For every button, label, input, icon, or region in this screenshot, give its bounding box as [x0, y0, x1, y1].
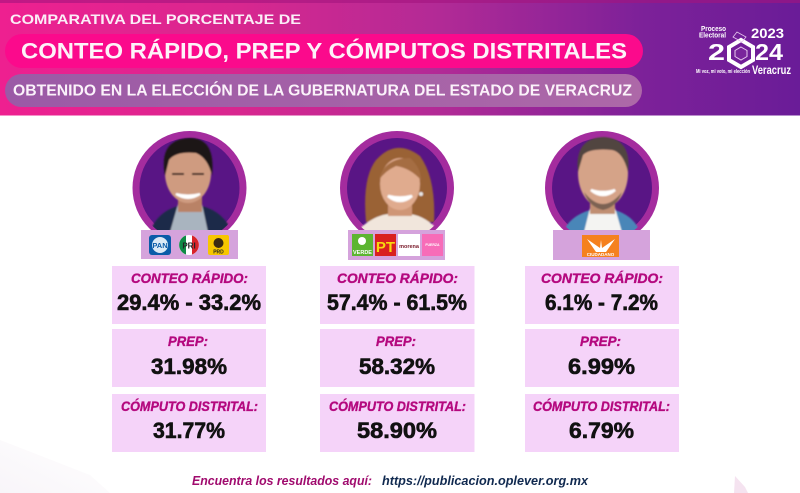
header line: comparativa: COMPARATIVA DEL PORCENTAJE DE [10, 11, 301, 27]
stat: conteo rápido 1: 29.4% - 33.2% [117, 290, 261, 315]
logo PRD: PRD [213, 250, 224, 256]
candidate 2 party logos [348, 230, 445, 260]
stat: PREP 2: 58.32% [359, 354, 435, 379]
stat: conteo rápido 2: CONTEO RÁPIDO: [337, 271, 458, 286]
logo: Proceso Electoral 2023-2024 Veracruz: Electoral [699, 30, 726, 40]
logo Movimiento Ciudadano: CIUDADANO [587, 252, 615, 257]
stat: cómputo distrital 2: CÓMPUTO DISTRITAL: [329, 399, 466, 414]
logo Fuerza por México: FUERZA [425, 243, 440, 247]
stat: PREP 2: PREP: [376, 334, 416, 349]
pink title pill: CONTEO RÁPIDO, PREP Y CÓMPUTOS DISTRITALES [21, 38, 627, 64]
stat: conteo rápido 3 [525, 266, 679, 324]
logo: Proceso Electoral 2023-2024 Veracruz: 2 [708, 39, 725, 65]
stat: cómputo distrital 2 [320, 394, 474, 452]
stat: PREP 1 [112, 329, 266, 387]
candidate 3 portrait [545, 131, 659, 230]
footer link line: Encuentra los resultados aquí: [192, 474, 372, 488]
stat: conteo rápido 3: CONTEO RÁPIDO: [541, 271, 663, 286]
logo PAN: PAN [152, 241, 168, 250]
candidate 1 party logos [141, 230, 238, 259]
logo: Proceso Electoral 2023-2024 Veracruz: Proceso [701, 24, 726, 33]
stat: cómputo distrital 1: CÓMPUTO DISTRITAL: [121, 399, 258, 414]
footer link line: https://publicacion.oplever.org.mx [382, 474, 589, 488]
logo: Proceso Electoral 2023-2024 Veracruz [696, 24, 791, 77]
stat: cómputo distrital 3 [525, 394, 679, 452]
stat: cómputo distrital 2: 58.90% [357, 418, 437, 443]
stat: PREP 3: 6.99% [568, 354, 635, 379]
logo PRI: PRI [182, 242, 196, 250]
stat: conteo rápido 2 [320, 266, 474, 324]
stat: PREP 1: 31.98% [151, 354, 227, 379]
stat: PREP 3: PREP: [580, 334, 621, 349]
candidate 1 portrait [132, 131, 246, 230]
stat: conteo rápido 1 [112, 266, 266, 324]
logo: Proceso Electoral 2023-2024 Veracruz: Mi voz, mi voto, mi elección [696, 69, 750, 75]
footer link line [192, 474, 589, 488]
logo: Proceso Electoral 2023-2024 Veracruz: Veracruz [752, 65, 791, 77]
purple subtitle pill [5, 74, 642, 107]
header banner [0, 0, 800, 116]
logo Verde: VERDE [353, 250, 372, 256]
stat: cómputo distrital 3: CÓMPUTO DISTRITAL: [533, 399, 670, 414]
column 2 results [320, 266, 474, 452]
logo: Proceso Electoral 2023-2024 Veracruz: 24 [755, 39, 783, 65]
stat: cómputo distrital 3: 6.79% [569, 418, 634, 443]
candidate 2 portrait [340, 131, 454, 230]
stat: conteo rápido 2: 57.4% - 61.5% [327, 290, 467, 315]
stat: cómputo distrital 1 [112, 394, 266, 452]
stat: PREP 3 [525, 329, 679, 387]
purple subtitle pill: OBTENIDO EN LA ELECCIÓN DE LA GUBERNATURA DEL ESTADO DE VERACRUZ [13, 82, 633, 100]
stat: conteo rápido 3: 6.1% - 7.2% [545, 290, 658, 315]
stat: PREP 1: PREP: [168, 334, 208, 349]
logo Morena: morena [399, 244, 420, 250]
column 1 results [112, 266, 266, 452]
logo PT: PT [376, 239, 395, 256]
stat: conteo rápido 1: CONTEO RÁPIDO: [131, 271, 248, 286]
column 3 results [525, 266, 679, 452]
pink title pill [5, 34, 643, 68]
candidate 3 party logo [553, 230, 650, 260]
stat: PREP 2 [320, 329, 474, 387]
stat: cómputo distrital 1: 31.77% [153, 418, 225, 443]
logo: Proceso Electoral 2023-2024 Veracruz: 2023 [751, 25, 784, 41]
